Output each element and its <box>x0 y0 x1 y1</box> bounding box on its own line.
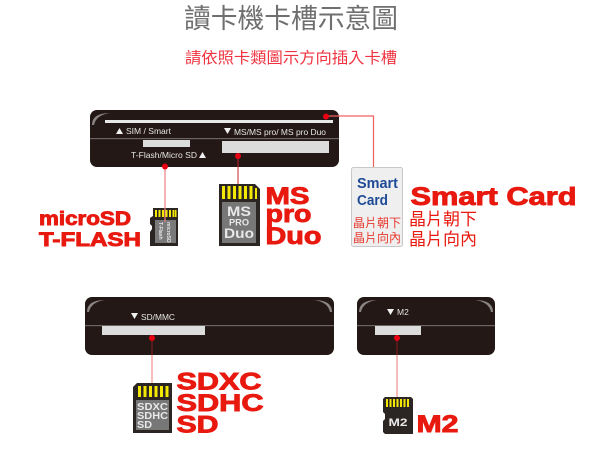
label: M2: M2 <box>416 411 458 438</box>
card: SD: SDHC <box>137 411 168 422</box>
card: MS pro Duo: Duo <box>224 225 254 241</box>
SD slot <box>102 326 205 335</box>
label: MS pro Duo: pro <box>266 201 312 228</box>
label: MS pro Duo: Duo <box>266 223 322 250</box>
subtitle: 請依照卡類圖示方向插入卡槽 <box>185 50 397 67</box>
card: microSD: microSD <box>165 222 171 243</box>
label: MS slot: MS/MS pro/ MS pro Duo <box>234 127 326 137</box>
card: SD: SD <box>137 420 152 431</box>
title: 讀卡機卡槽示意圖 <box>184 4 398 34</box>
label: Smart Card <box>409 183 576 249</box>
T-Flash slot <box>143 140 190 147</box>
card: MS pro Duo: PRO <box>229 218 249 228</box>
label: MS pro Duo <box>266 183 322 250</box>
connector: smart card <box>323 114 374 167</box>
label: Smart Card: Smart Card <box>410 183 576 211</box>
card: MS pro Duo: MS <box>227 204 251 219</box>
label: SDXC SDHC SD <box>176 368 264 438</box>
label: Smart Card: 晶片向內 <box>409 230 477 249</box>
panel: top card reader <box>90 110 339 167</box>
connector: T-Flash <box>162 164 168 222</box>
SIM slot bar <box>105 120 333 123</box>
label: microSD T-FLASH: microSD <box>39 209 131 230</box>
label: SD/MMC: SD/MMC <box>141 312 175 322</box>
card: Smart Card <box>352 168 402 246</box>
label: microSD T-FLASH: T-FLASH <box>39 230 141 251</box>
label: MS pro Duo: MS <box>266 183 310 210</box>
connector: MS <box>235 153 241 186</box>
label: microSD T-FLASH <box>39 209 141 251</box>
label: Smart Card: 晶片朝下 <box>409 210 477 229</box>
card: M2: M2 <box>388 417 408 429</box>
panel: M2 card reader <box>357 297 495 355</box>
connector: M2 <box>394 335 400 398</box>
card: Smart Card: Smart <box>357 176 398 192</box>
label: SDXC SDHC SD: SD <box>176 412 218 438</box>
card: Smart Card: Card <box>357 193 388 209</box>
panel: SD card reader <box>85 297 334 355</box>
label: SIM / Smart: SIM / Smart <box>126 126 172 136</box>
MS slot <box>222 141 329 153</box>
connector: SD <box>149 335 155 384</box>
label: T-Flash: T-Flash/Micro SD <box>131 150 197 160</box>
card: SD <box>133 383 172 433</box>
card: microSD <box>150 208 178 246</box>
card: SD: SDXC <box>137 402 168 413</box>
card: Smart Card: 晶片向內 <box>353 230 401 245</box>
label: SDXC SDHC SD: SDXC <box>176 368 262 396</box>
label: M2: M2 <box>397 307 409 317</box>
card: microSD: T-Flash <box>157 222 163 240</box>
M2 slot <box>375 326 421 335</box>
card: MS pro Duo <box>219 184 260 246</box>
card: M2 <box>383 397 413 434</box>
label: SDXC SDHC SD: SDHC <box>176 390 264 417</box>
card: Smart Card: 晶片朝下 <box>353 216 401 230</box>
